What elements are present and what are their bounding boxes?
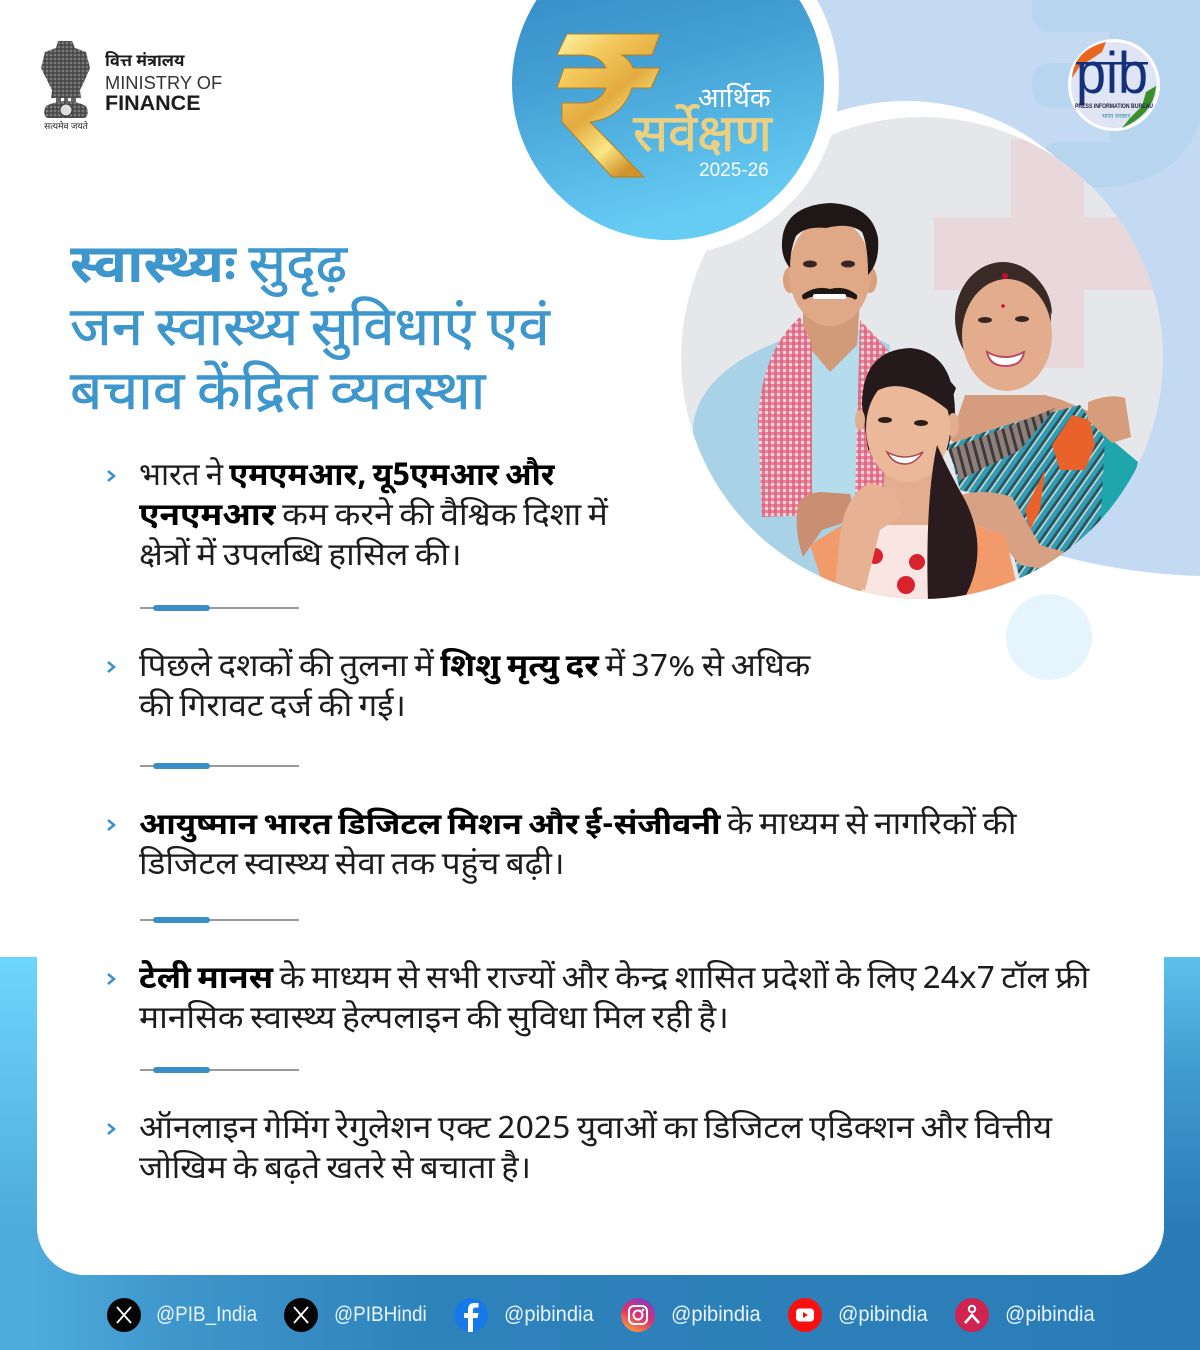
- saffron arc: [1072, 42, 1106, 78]
- icon: youtube: [788, 1298, 822, 1332]
- bullet 3 line 1: आयुष्मान भारत डिजिटल मिशन और ई-संजीवनी के माध्यम से नागरिकों की: [139, 806, 1017, 847]
- icon: koo-style app: [955, 1298, 989, 1332]
- small pale circle: [1006, 594, 1092, 680]
- icon: gold rupee: [557, 34, 660, 177]
- divider: [140, 763, 299, 769]
- bullet 2 line 1: पिछले दशकों की तुलना में शिशु मृत्यु दर में 37% से अधिक: [139, 648, 810, 689]
- bullet 5: [107, 1110, 1053, 1191]
- left gradient strip: [0, 957, 120, 1225]
- white content card: [37, 900, 1164, 1275]
- heading line 3: बचाव केंद्रित व्यवस्था: [70, 362, 485, 432]
- divider: [140, 1067, 299, 1073]
- footer gradient band: [0, 1225, 1200, 1350]
- man: [693, 203, 890, 600]
- handle: koo-style app: @pibindia: [1005, 1303, 1095, 1326]
- light blue backdrop: [800, 0, 1200, 576]
- bullet 1: [107, 457, 608, 578]
- pib wordmark: pib: [1076, 41, 1148, 106]
- icon: X: [284, 1298, 318, 1332]
- bullet 5 line 2: जोखिम के बढ़ते खतरे से बचाता है।: [139, 1150, 531, 1191]
- ministry of: MINISTRY OF: [105, 72, 222, 93]
- pib hindi caption: भारत सरकार: [1102, 114, 1131, 121]
- badge text: survey: आर्थिक: [698, 84, 771, 119]
- bullet 4 line 2: मानसिक स्वास्थ्य हेल्पलाइन की सुविधा मिल रही है।: [139, 1000, 729, 1041]
- family circle backdrop: [681, 117, 1163, 599]
- finance: FINANCE: [105, 91, 201, 115]
- woman: [948, 262, 1138, 580]
- bullet 2 line 2: की गिरावट दर्ज की गई।: [139, 688, 406, 729]
- chevron: [107, 470, 116, 482]
- handle: PIB_India: @PIB_India: [156, 1303, 257, 1326]
- badge text: survey title: सर्वेक्षण: [633, 105, 772, 173]
- white arc behind family circle: [679, 101, 1133, 555]
- right gradient strip: [1080, 957, 1200, 1225]
- top right graphic background: [512, 0, 1200, 580]
- divider: [140, 605, 299, 611]
- ministry wordmark: [105, 51, 222, 115]
- family photo illustration: [693, 203, 1138, 599]
- heading line 2: जन स्वास्थ्य सुविधाएं एवं: [70, 298, 550, 368]
- bullet 3: [107, 806, 1017, 887]
- white ring behind survey badge: [497, 0, 839, 255]
- chevron: [107, 661, 116, 673]
- icon: X: [107, 1298, 141, 1332]
- green arc: [1122, 86, 1156, 128]
- bottom gradient panel: [0, 957, 1200, 1350]
- icon: instagram: [621, 1298, 655, 1332]
- survey badge circle: [512, 0, 824, 240]
- bullet 4: [107, 960, 1090, 1041]
- icon: facebook: [454, 1298, 488, 1332]
- footer social row: [107, 1298, 1095, 1332]
- bullet 2: [107, 648, 811, 729]
- bullet 5 line 1: ऑनलाइन गेमिंग रेगुलेशन एक्ट 2025 युवाओं का डिजिटल एडिक्शन और वित्तीय: [139, 1110, 1052, 1151]
- girl: [810, 348, 1018, 605]
- bullet 1 line 2: एनएमआर कम करने की वैश्विक दिशा में: [139, 497, 608, 538]
- bullet 1 line 3: क्षेत्रों में उपलब्धि हासिल की।: [139, 537, 462, 578]
- heading line 1: स्वास्थ्यः सुदृढ़: [70, 235, 347, 305]
- badge text: year: 2025-26: [699, 160, 769, 181]
- chevron: [107, 1123, 116, 1135]
- chevron: [107, 819, 116, 831]
- bullet 1 line 1: भारत ने एमएमआर, यू5एमआर और: [139, 457, 555, 498]
- hindi ministry name: वित्त मंत्रालय: [105, 51, 184, 73]
- handle: youtube: @pibindia: [838, 1303, 928, 1326]
- logo: ministry of finance emblem: [41, 41, 90, 132]
- main heading: [70, 235, 551, 432]
- handle: facebook: @pibindia: [504, 1303, 594, 1326]
- bullet 3 line 2: डिजिटल स्वास्थ्य सेवा तक पहुंच बढ़ी।: [139, 846, 565, 887]
- handle: instagram: @pibindia: [671, 1303, 761, 1326]
- divider: [140, 917, 299, 923]
- chevron: [107, 973, 116, 985]
- handle: PIBHindi: @PIBHindi: [334, 1303, 427, 1326]
- pib logo: [1068, 39, 1160, 131]
- bullet 4 line 1: टेली मानस के माध्यम से सभी राज्यों और केन्द्र शासित प्रदेशों के लिए 24x7 टॉल फ्री: [139, 960, 1089, 1001]
